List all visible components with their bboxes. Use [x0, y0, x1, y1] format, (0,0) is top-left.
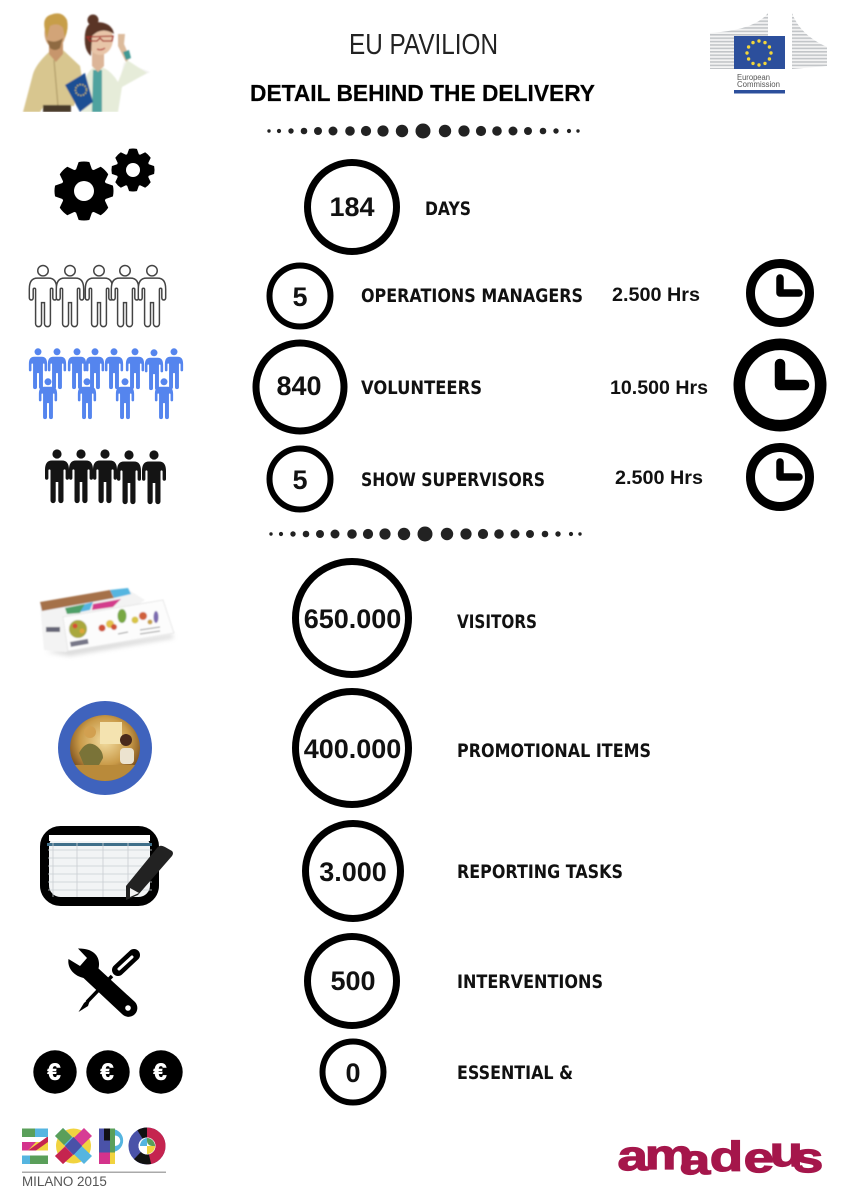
metric: 3.000 reporting tasks: REPORTING TASKS: [457, 862, 623, 883]
icon: euro coins: €: [100, 1059, 114, 1086]
metric: 840 volunteers: VOLUNTEERS: [361, 378, 482, 399]
metric: 400.000 promotional items: [296, 692, 651, 804]
icon: euro coins: €: [153, 1059, 167, 1086]
logo: Expo Milano 2015: [22, 1128, 166, 1189]
icon: large clock: [739, 344, 821, 426]
icon: blue volunteers: [29, 348, 183, 419]
woman: [82, 14, 150, 112]
metric: 650.000 visitors: [296, 562, 537, 674]
title: EU PAVILION: [349, 29, 498, 61]
icon: clock supervisors: [750, 448, 810, 506]
metric: 500 interventions: 500: [330, 966, 376, 996]
metric: 500 interventions: INTERVENTIONS: [457, 972, 603, 993]
hours: 2.500 supervisors: 2.500 Hrs: [615, 467, 703, 489]
blue EU folder: [65, 73, 93, 112]
letter O: [134, 1132, 160, 1160]
letter P: [99, 1128, 123, 1164]
hours: 10.500: 10.500 Hrs: [610, 377, 708, 399]
metric: 5 show supervisors: SHOW SUPERVISORS: [361, 470, 545, 491]
icon: reporting tablet and pencil: [44, 830, 173, 902]
icon: clock: [750, 264, 810, 322]
logo: European Commission: [710, 13, 827, 94]
icon: euro coins: €: [47, 1059, 61, 1086]
logo: European Commission: European: [737, 73, 770, 82]
letter X: [55, 1128, 92, 1164]
icon: Expo tickets: [40, 588, 174, 656]
metric: 650.000 visitors: VISITORS: [457, 612, 537, 633]
hours: 2.500: 2.500 Hrs: [612, 284, 700, 306]
logo: European Commission: Commission: [737, 80, 780, 89]
metric: 3.000 reporting tasks: 3.000: [319, 857, 387, 887]
subtitle: DETAIL BEHIND THE DELIVERY: [250, 80, 595, 106]
illustration: two cartoon characters: [23, 13, 150, 112]
metric: 0 essential: [322, 1042, 573, 1102]
metric: 0 essential: 0: [345, 1058, 361, 1088]
metric: 5 operations managers: 5: [292, 282, 308, 312]
metric: 184 days: DAYS: [425, 199, 471, 220]
logo: Expo Milano 2015: MILANO 2015: [22, 1174, 107, 1189]
icon: euro coins: [33, 1050, 183, 1094]
icon: white outlined people: [29, 265, 166, 327]
man: [23, 13, 82, 112]
metric: 840 volunteers: 840: [276, 371, 322, 401]
metric: 3.000 reporting tasks: [306, 824, 623, 918]
metric: 400.000 promotional items: PROMOTIONAL ITEMS: [457, 741, 651, 762]
letter E: [22, 1128, 48, 1164]
metric: 500 interventions: [308, 936, 603, 1026]
icon: black supervisors: [45, 449, 166, 504]
metric: 184 days: [308, 162, 471, 252]
metric: 650.000 visitors: 650.000: [304, 604, 401, 634]
metric: 5 show supervisors: [270, 448, 545, 510]
icon: wrench and screwdriver: [68, 948, 137, 1017]
metric: 5 operations managers: [270, 266, 583, 326]
icon: gears: [55, 149, 154, 220]
metric: 5 operations managers: OPERATIONS MANAGERS: [361, 286, 583, 307]
metric: 5 show supervisors: 5: [292, 465, 308, 495]
dotted divider middle: [269, 526, 582, 542]
logo: Amadeus: amadeus: [618, 1129, 823, 1183]
metric: 840 volunteers: [256, 343, 482, 431]
metric: 0 essential: ESSENTIAL &: [457, 1063, 573, 1084]
icon: promotional medal: [58, 701, 152, 795]
dotted divider top: [267, 124, 580, 138]
metric: 400.000 promotional items: 400.000: [304, 734, 401, 764]
metric: 184 days: 184: [329, 192, 375, 222]
